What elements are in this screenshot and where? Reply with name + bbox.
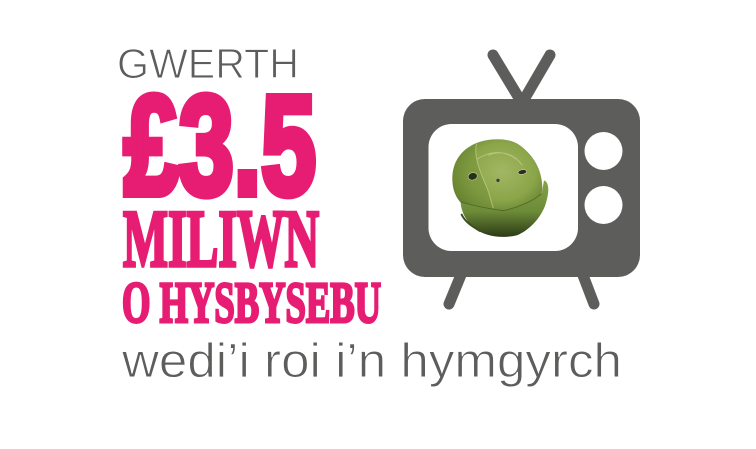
tv legs (449, 270, 594, 304)
tv knob bottom (584, 186, 622, 224)
tv body (403, 99, 640, 277)
sprout leaf veins (476, 144, 522, 208)
subheading: O HYSBYSEBU: O HYSBYSEBU (122, 270, 381, 335)
amount unit: MILIWN: MILIWN (123, 193, 319, 284)
sprout nose (496, 178, 500, 182)
amount: £3.5: £3.5 (124, 66, 316, 224)
tv screen (428, 124, 578, 251)
heading: GWERTH: GWERTH (117, 40, 299, 87)
sprout lower leaf (461, 180, 548, 237)
sprout curled leaf edge (462, 215, 480, 231)
sprout head (452, 139, 542, 216)
sprout leaf edge highlight (461, 194, 542, 211)
icon: television (403, 55, 640, 304)
sprout eye left (467, 172, 478, 181)
tv knob top (584, 132, 622, 170)
caption: wedi'i roi i'n hymgyrch: wedi’i roi i’n hymgyrch (121, 335, 622, 388)
sprout eye right (518, 169, 527, 175)
sprout left shade (454, 144, 493, 208)
antenna (493, 55, 550, 103)
icon: brussels sprout face (452, 139, 548, 237)
